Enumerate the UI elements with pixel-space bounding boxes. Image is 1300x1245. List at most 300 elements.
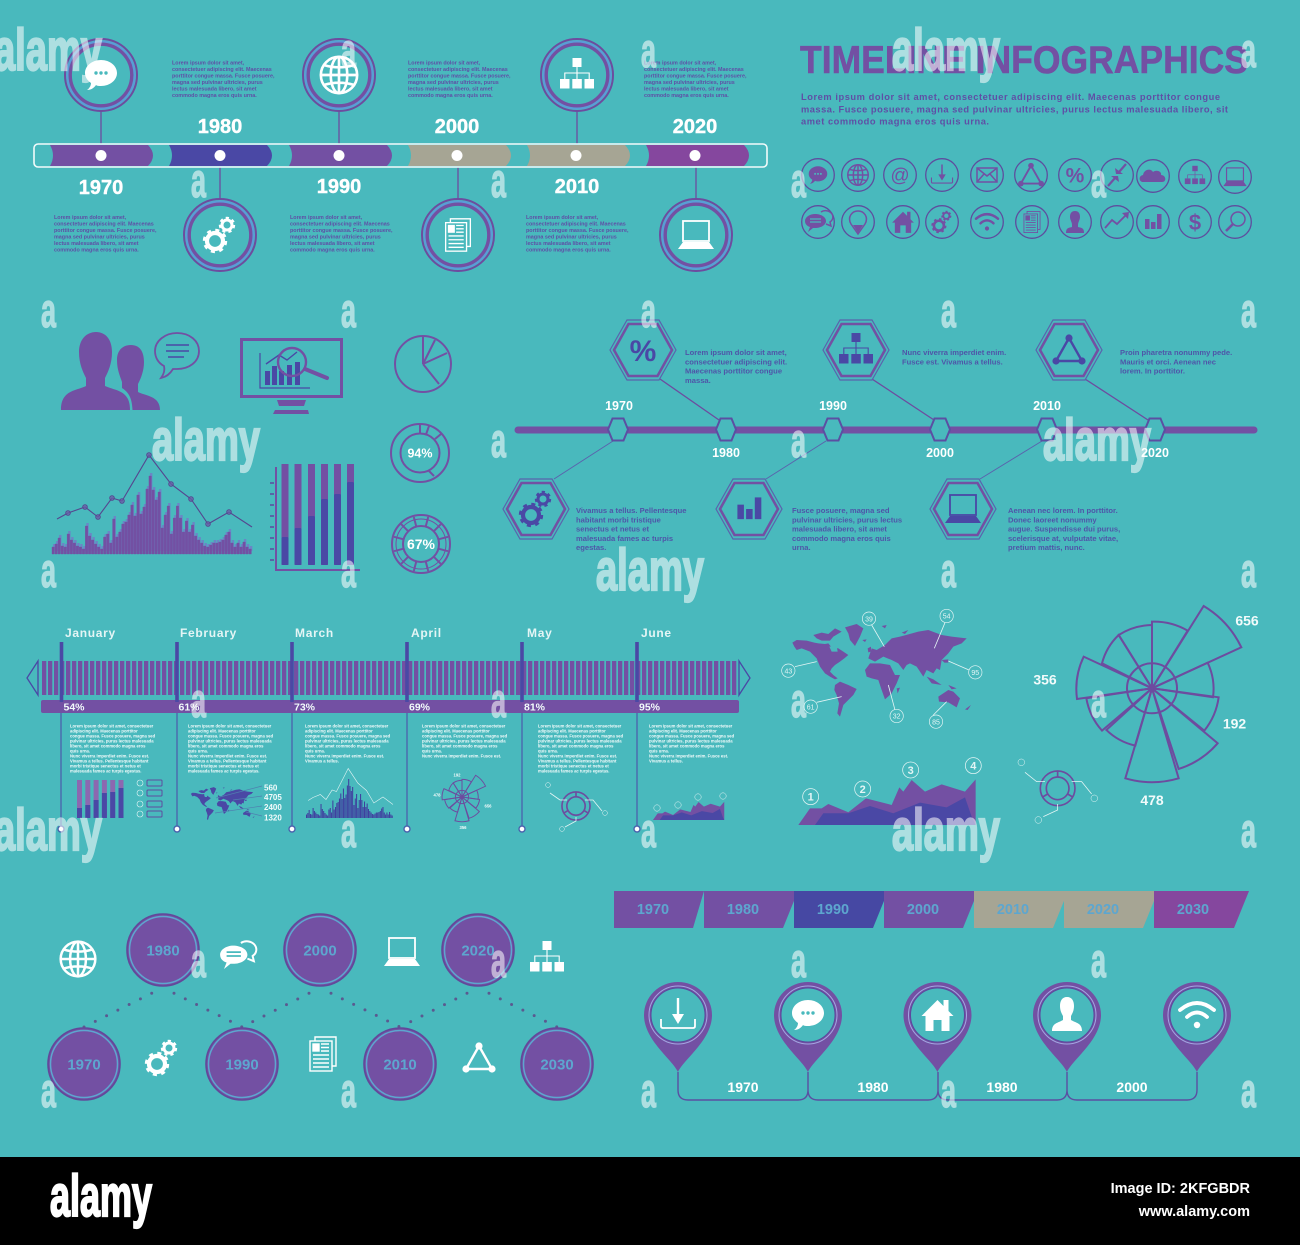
hex text 5: commodo magna eros quis: [792, 534, 891, 543]
watermarks: a: [341, 1065, 356, 1118]
hex year labels: 1990: [819, 399, 847, 413]
text block 3: magna sed pulvinar ultricies, purus: [644, 80, 735, 86]
month text: May: Lorem ipsum dolor sit amet, consectetuer: [538, 724, 622, 728]
text block 1: lectus malesuada libero, sit amet: [172, 86, 257, 92]
hex text 2: Nunc viverra imperdiet enim.: [902, 348, 1006, 357]
mini chart: stacked bars: [77, 780, 124, 818]
watermarks: a: [341, 25, 356, 78]
ribbon 2000: 2000: [907, 902, 939, 918]
ribbon 1980: 1980: [727, 902, 759, 918]
month text: May: libero, sit amet commodo magna eros: [538, 744, 614, 748]
month text: March: Vivamus a tellus.: [305, 758, 339, 764]
month text: March: pulvinar ultricies, purus lectus malesuada: [305, 738, 389, 744]
month text: June: libero, sit amet commodo magna eros: [649, 744, 725, 748]
icon: gears circle: [184, 199, 256, 271]
mini rose chart: 478: [434, 792, 441, 798]
icon: network: [530, 941, 564, 972]
month text: March: Lorem ipsum dolor sit amet, consectetuer: [305, 724, 389, 728]
hex text 6: augue. Suspendisse dui purus,: [1008, 525, 1120, 534]
text block 3: Lorem ipsum dolor sit amet,: [644, 60, 717, 66]
percent bar: [41, 700, 739, 713]
watermarks: a: [941, 545, 956, 598]
month labels: March: [295, 626, 334, 640]
month text: May: morbi tristique senectus et netus et: [538, 764, 609, 768]
chart: large rose: [1033, 606, 1259, 808]
watermarks: a: [1091, 155, 1106, 208]
watermarks: a: [1241, 545, 1256, 598]
text block 2: consectetuer adipiscing elit. Maecenas: [408, 67, 508, 73]
watermarks: a: [1241, 285, 1256, 338]
text block 5: lectus malesuada libero, sit amet: [290, 241, 375, 247]
text block 1: consectetuer adipiscing elit. Maecenas: [172, 67, 272, 73]
map callouts: 39: [865, 616, 873, 623]
icon: laptop: [1219, 161, 1251, 193]
intro paragraph: [801, 92, 1228, 126]
text block 2: Lorem ipsum dolor sit amet,: [408, 60, 481, 66]
month text: May: adipiscing elit. Maecenas porttitor: [538, 728, 606, 734]
panel: world map: [782, 609, 982, 728]
panel: pin timeline: [644, 982, 1231, 1100]
footer bar: [0, 1157, 1300, 1245]
text block 3: lectus malesuada libero, sit amet: [644, 86, 729, 92]
hex text 1: massa.: [685, 376, 711, 385]
icon: globe: [61, 942, 95, 976]
hex icon: bars: [716, 479, 782, 539]
text block 5: Lorem ipsum dolor sit amet,: [290, 215, 363, 221]
year circle 2020: 2020: [461, 942, 495, 960]
pin: chat: [774, 982, 842, 1072]
pin: person: [1033, 982, 1101, 1072]
mini map: 4705: [264, 793, 282, 802]
month labels: [65, 626, 672, 640]
hex text 1: Lorem ipsum dolor sit amet,: [685, 348, 787, 357]
hex text 5: malesuada libero, sit amet: [792, 525, 887, 534]
ribbon 1980: [704, 891, 798, 928]
connector lines lower: [554, 441, 1042, 479]
area labels: 4: [970, 761, 977, 773]
icon: dollar: $: [1189, 210, 1201, 235]
watermarks: a: [941, 1065, 956, 1118]
text block 6: lectus malesuada libero, sit amet: [526, 241, 611, 247]
area labels: [803, 758, 981, 805]
year circle 1970: [48, 1028, 120, 1100]
text block 1: commodo magna eros quis urna.: [172, 93, 257, 99]
month text: January: morbi tristique senectus et netus et: [70, 764, 141, 768]
mini rose chart: 192: [454, 772, 461, 778]
footer url: www.alamy.com: [1138, 1204, 1250, 1220]
ribbon 1970: 1970: [637, 902, 669, 918]
month text: April: adipiscing elit. Maecenas porttitor: [422, 728, 490, 734]
icon: network: [1179, 160, 1211, 192]
text block 5: consectetuer adipiscing elit. Maecenas: [290, 222, 390, 228]
text block 4: consectetuer adipiscing elit. Maecenas: [54, 222, 154, 228]
watermarks: a: [491, 675, 506, 728]
text block 2: magna sed pulvinar ultricies, purus: [408, 80, 499, 86]
hex year labels: [605, 399, 1169, 460]
watermarks: a: [191, 935, 206, 988]
icon: pin: [842, 206, 874, 238]
mini donut: [546, 783, 607, 831]
pin labels: 1980: [857, 1079, 889, 1095]
watermarks: alamy: [152, 408, 260, 473]
hex year labels: 1970: [605, 399, 633, 413]
text block 1: porttitor congue massa. Fusce posuere,: [172, 74, 275, 80]
map callouts: [782, 609, 982, 728]
watermarks: a: [341, 285, 356, 338]
year circle 2030: 2030: [540, 1056, 574, 1074]
hex year labels: 2000: [926, 446, 954, 460]
month text: June: pulvinar ultricies, purus lectus malesuada: [649, 738, 733, 744]
year circle 1990: [206, 1028, 278, 1100]
rose labels: 656: [1235, 612, 1259, 628]
icon: double chat: [220, 941, 256, 969]
year circle 1980: [127, 914, 199, 986]
hex year labels: 2020: [1141, 446, 1169, 460]
text block 3: commodo magna eros quis urna.: [644, 93, 729, 99]
year circle 1980: 1980: [146, 942, 180, 960]
area labels: 1: [808, 792, 814, 804]
hex text 4: Vivamus a tellus. Pellentesque: [576, 506, 686, 515]
icon: speech bubble: [155, 333, 199, 378]
ribbon 1990: 1990: [817, 902, 849, 918]
hex icon: laptop: [930, 479, 996, 539]
month text: January: adipiscing elit. Maecenas porttitor: [70, 728, 138, 734]
rose labels: 192: [1223, 716, 1246, 732]
hex text 6: Aenean nec lorem. In porttitor.: [1008, 506, 1118, 515]
mini rose chart: 656: [484, 804, 492, 808]
text block 6: consectetuer adipiscing elit. Maecenas: [526, 222, 626, 228]
panel: hexagon timeline: [503, 320, 1254, 552]
watermarks: a: [341, 805, 356, 858]
watermarks: a: [1241, 25, 1256, 78]
text block 6: magna sed pulvinar ultricies, purus: [526, 234, 617, 240]
watermarks: a: [191, 675, 206, 728]
timeline dots: [96, 150, 700, 161]
month text: March: adipiscing elit. Maecenas porttitor: [305, 728, 373, 734]
timeline segments: [50, 145, 749, 166]
icon: download: [926, 159, 958, 191]
year labels: 1980: [198, 116, 242, 138]
month text: June: Vivamus a tellus.: [649, 758, 683, 764]
watermarks: a: [641, 25, 656, 78]
mini map: 560: [264, 784, 278, 792]
watermarks: a: [791, 155, 806, 208]
year labels: 2010: [555, 176, 599, 198]
year circle 2010: [364, 1028, 436, 1100]
chart: histogram with line: [52, 453, 252, 554]
mini histogram: [306, 768, 393, 818]
panel: ribbon timeline: [614, 891, 1249, 928]
month text: May: malesuada fames ac turpis egestas.: [538, 768, 609, 774]
icon: gears: [146, 1041, 176, 1075]
icon: arrows: [1101, 159, 1133, 191]
rose labels: 478: [1140, 792, 1164, 808]
percent labels: 61%: [178, 702, 200, 714]
text block 5: magna sed pulvinar ultricies, purus: [290, 234, 381, 240]
hex text 4: malesuada fames ac turpis: [576, 534, 673, 543]
watermarks: a: [641, 805, 656, 858]
watermarks: a: [41, 285, 56, 338]
month text: March: quis urna.: [305, 748, 325, 754]
icon: triangle: [1015, 159, 1047, 191]
icon: cloud: [1137, 160, 1169, 192]
chart: pie: [395, 336, 451, 392]
month labels: February: [180, 626, 237, 640]
text block 6: porttitor congue massa. Fusce posuere,: [526, 228, 629, 234]
hex year labels: 1980: [712, 446, 740, 460]
month text: January: quis urna.: [70, 748, 90, 754]
month text: February: congue massa. Fusce posuere, magna sed: [188, 734, 274, 738]
percent labels: 54%: [64, 702, 85, 714]
panel: charts and icons: [52, 332, 451, 573]
icon: home: [887, 206, 919, 238]
percent labels: 69%: [409, 702, 431, 714]
hex text 5: pulvinar ultricies, purus lectus: [792, 515, 902, 524]
connector lines: [660, 379, 1148, 420]
mini map: 1320: [264, 814, 282, 822]
text block 5: commodo magna eros quis urna.: [290, 248, 375, 254]
month text: April: pulvinar ultricies, purus lectus malesuada: [422, 738, 506, 744]
chart: small donut: [1018, 759, 1098, 823]
hex text 6: Donec laoreet nonummy: [1008, 515, 1097, 524]
pin: home: [904, 982, 972, 1072]
chart: 67% ring: [392, 515, 450, 573]
icon: document: [1016, 206, 1048, 238]
year circle 2000: 2000: [303, 942, 337, 960]
watermarks: a: [1091, 935, 1106, 988]
chart: 94% ring: 94%: [407, 446, 433, 460]
icon: double chat: [802, 206, 834, 238]
month text: March: congue massa. Fusce posuere, magna sed: [305, 734, 391, 738]
text block 6: commodo magna eros quis urna.: [526, 248, 611, 254]
month text: February: pulvinar ultricies, purus lectus malesuada: [188, 738, 272, 744]
icon: percent: [1059, 159, 1091, 191]
dotted connectors: [84, 993, 557, 1027]
icon: document: [310, 1037, 336, 1071]
month text: April: libero, sit amet commodo magna eros: [422, 744, 498, 748]
chart: 94% ring: [391, 424, 449, 482]
month text: January: Nunc viverra imperdiet enim. Fusce est.: [70, 754, 149, 758]
hex text 3: lorem. In porttitor.: [1120, 367, 1185, 376]
map callouts: 85: [932, 719, 940, 726]
ribbon 2030: [1154, 891, 1249, 928]
year labels: 1970: [79, 177, 123, 199]
footer image id: Image ID: 2KFGBDR: [1111, 1181, 1251, 1197]
year circle 1990: 1990: [225, 1056, 259, 1074]
hex text 3: Proin pharetra nonummy pede.: [1120, 348, 1232, 357]
watermarks: alamy: [892, 798, 1000, 863]
mini map: 2400: [264, 803, 282, 812]
mini map: [191, 784, 282, 822]
month text: May: pulvinar ultricies, purus lectus malesuada: [538, 738, 622, 744]
hex year labels: 2010: [1033, 399, 1061, 413]
ribbon 2030: 2030: [1177, 902, 1209, 918]
watermarks: alamy: [596, 538, 704, 603]
percent labels: 81%: [524, 702, 546, 714]
text block 3: consectetuer adipiscing elit. Maecenas: [644, 67, 744, 73]
year circle 2010: 2010: [383, 1056, 417, 1074]
icon: laptop: [384, 938, 420, 966]
intro paragraph: amet commodo magna eros quis urna.: [801, 116, 989, 126]
percent labels: [64, 702, 661, 714]
area labels: 2: [860, 784, 866, 796]
month labels: May: [527, 626, 552, 640]
map callouts: 32: [893, 714, 901, 721]
month text: June: congue massa. Fusce posuere, magna sed: [649, 734, 735, 738]
month text: June: adipiscing elit. Maecenas porttitor: [649, 728, 717, 734]
month text: January: congue massa. Fusce posuere, magna sed: [70, 734, 156, 738]
watermarks: a: [491, 155, 506, 208]
timeline bar frame: [34, 144, 767, 167]
watermarks: a: [41, 545, 56, 598]
ribbon 2020: [1064, 891, 1158, 928]
timeline line: [518, 426, 1254, 434]
icon: laptop circle: [660, 199, 732, 271]
year circle 2000: [284, 914, 356, 986]
text block 1: Lorem ipsum dolor sit amet,: [172, 60, 245, 66]
watermarks: alamy: [1043, 408, 1151, 473]
ribbon 2000: [884, 891, 978, 928]
watermarks: a: [791, 675, 806, 728]
hex text 3: Mauris et orci. Aenean nec: [1120, 357, 1216, 366]
month text: February: Lorem ipsum dolor sit amet, consectetuer: [188, 724, 272, 728]
watermarks: a: [1241, 1065, 1256, 1118]
rose labels: [1033, 612, 1259, 808]
year labels: [79, 116, 717, 199]
map callouts: 54: [943, 614, 951, 621]
text block 2: lectus malesuada libero, sit amet: [408, 86, 493, 92]
mini legend: [137, 780, 162, 817]
month markers: [62, 642, 637, 702]
year labels: 2000: [435, 116, 479, 138]
title: TIMELINE INFOGRAPHICS: [800, 39, 1248, 82]
hex text 1: Maecenas porttitor congue: [685, 367, 782, 376]
watermarks: a: [641, 285, 656, 338]
text block 4: porttitor congue massa. Fusce posuere,: [54, 228, 157, 234]
footer logo: alamy: [50, 1164, 152, 1229]
month text: April: quis urna.: [422, 748, 442, 754]
month text: January: libero, sit amet commodo magna eros: [70, 744, 146, 748]
month text: January: malesuada fames ac turpis egestas.: [70, 768, 141, 774]
panel: icon set: [802, 159, 1251, 238]
year labels: 1990: [317, 176, 361, 198]
hex text 6: scelerisque at, vulputate vitae,: [1008, 534, 1118, 543]
ribbon 1990: [794, 891, 888, 928]
month text: May: quis urna.: [538, 748, 558, 754]
chart: stacked bars: [270, 464, 360, 570]
hex icon: percent: %: [630, 335, 656, 368]
watermarks: alamy: [892, 18, 1000, 83]
icon: triangle: [462, 1042, 496, 1073]
pin labels: 1980: [986, 1079, 1018, 1095]
pin labels: 1970: [727, 1079, 759, 1095]
ribbon 2020: 2020: [1087, 902, 1119, 918]
month labels: June: [641, 626, 672, 640]
icon: bars: [1137, 206, 1169, 238]
month text: January: Vivamus a tellus. Pellentesque habitant: [70, 758, 149, 764]
text block 1: magna sed pulvinar ultricies, purus: [172, 80, 263, 86]
month text: May: Nunc viverra imperdiet enim. Fusce est.: [538, 754, 617, 758]
watermarks: a: [791, 415, 806, 468]
pin labels: [727, 1079, 1148, 1095]
month text: January: pulvinar ultricies, purus lectus malesuada: [70, 738, 154, 744]
mini rose chart: [434, 772, 492, 830]
watermarks: a: [491, 935, 506, 988]
watermarks: a: [1091, 675, 1106, 728]
month text: January: Lorem ipsum dolor sit amet, consectetuer: [70, 724, 154, 728]
icon: magnifier: [1219, 206, 1251, 238]
intro paragraph: massa. Fusce posuere, magna sed pulvinar ultricies, purus lectus malesuada libero, sit: [801, 104, 1228, 114]
text block 4: Lorem ipsum dolor sit amet,: [54, 215, 127, 221]
text block 2: porttitor congue massa. Fusce posuere,: [408, 74, 511, 80]
watermarks: a: [341, 545, 356, 598]
map callouts: 43: [784, 668, 792, 675]
icon: wifi: [971, 206, 1003, 238]
panel: top timeline: [34, 39, 767, 271]
year circle 1970: 1970: [67, 1056, 101, 1074]
month text: February: Nunc viverra imperdiet enim. Fusce est.: [188, 754, 267, 758]
month text: March: Nunc viverra imperdiet enim. Fusce est.: [305, 754, 384, 758]
icon: at sign: [884, 159, 916, 191]
text block 5: porttitor congue massa. Fusce posuere,: [290, 228, 393, 234]
text block 4: magna sed pulvinar ultricies, purus: [54, 234, 145, 240]
hex text 1: consectetuer adipiscing elit.: [685, 357, 787, 366]
hex text 4: egestas.: [576, 543, 606, 552]
icon: gears: [926, 206, 958, 238]
text block 6: Lorem ipsum dolor sit amet,: [526, 215, 599, 221]
intro paragraph: Lorem ipsum dolor sit amet, consectetuer adipiscing elit. Maecenas porttitor congue: [801, 92, 1220, 102]
ribbon 1970: [614, 891, 704, 928]
pin: wifi: [1163, 982, 1231, 1072]
month drop lines: [61, 713, 637, 828]
icon: mail: [971, 159, 1003, 191]
hex markers: [608, 418, 1165, 440]
month labels: April: [411, 626, 442, 640]
icon: trend: [1101, 206, 1133, 238]
icon: at sign: @: [890, 166, 910, 186]
text block 4: commodo magna eros quis urna.: [54, 248, 139, 254]
month text: March: libero, sit amet commodo magna eros: [305, 744, 381, 748]
hex text 5: urna.: [792, 543, 811, 552]
text block 2: commodo magna eros quis urna.: [408, 93, 493, 99]
hex text 2: Fusce est. Vivamus a tellus.: [902, 357, 1003, 366]
hex icon: triangle: [1036, 320, 1102, 380]
month text: February: morbi tristique senectus et netus et: [188, 764, 259, 768]
month text: April: Nunc viverra imperdiet enim. Fusce est.: [422, 754, 501, 758]
month text: February: quis urna.: [188, 748, 208, 754]
hex text 4: habitant morbi tristique: [576, 515, 661, 524]
icon: dollar: [1179, 206, 1211, 238]
watermarks: a: [491, 415, 506, 468]
hex icon: network: [823, 320, 889, 380]
icon: two people: [61, 332, 160, 410]
icon: document circle: [422, 199, 494, 271]
year labels: 2020: [673, 116, 717, 138]
panel: monthly timeline: [27, 626, 750, 832]
rose labels: 356: [1033, 672, 1057, 688]
right arrow: [739, 661, 750, 695]
area labels: 3: [908, 765, 914, 777]
watermarks: a: [191, 155, 206, 208]
ribbon 2010: [974, 891, 1068, 928]
percent labels: 73%: [294, 702, 316, 714]
text block 4: lectus malesuada libero, sit amet: [54, 241, 139, 247]
hex icon: gears: [503, 479, 569, 539]
month text: May: congue massa. Fusce posuere, magna sed: [538, 734, 624, 738]
map callouts: 61: [807, 704, 815, 711]
watermarks: a: [1241, 805, 1256, 858]
watermarks: a: [791, 935, 806, 988]
